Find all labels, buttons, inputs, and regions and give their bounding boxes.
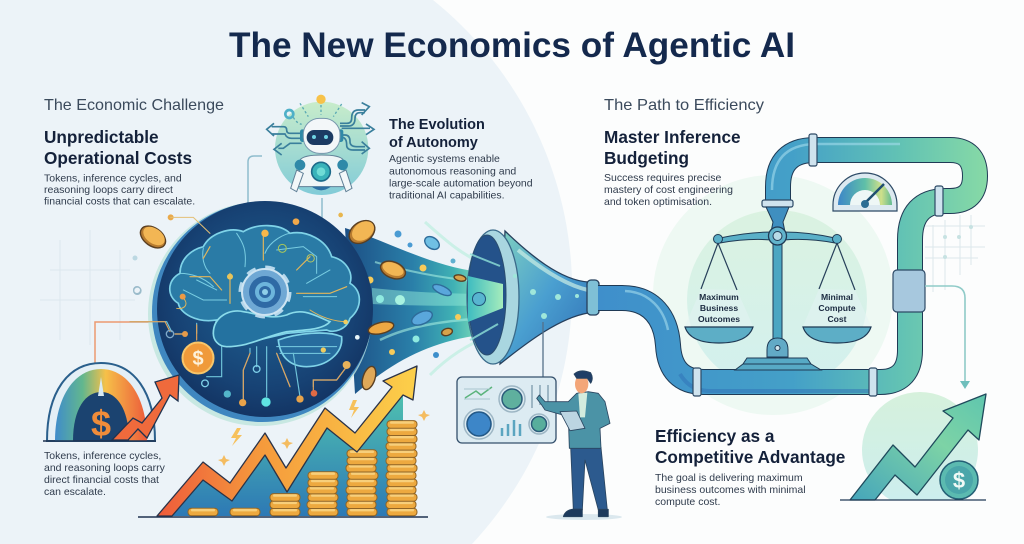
label: minimal compute cost: Cost xyxy=(827,314,847,324)
body: operational costs: financial costs that can escalate. xyxy=(44,196,195,208)
body: budgeting: Success requires precise xyxy=(604,172,721,184)
rising cost arrow xyxy=(112,375,179,440)
body: competitive advantage: business outcomes with minimal xyxy=(655,484,806,496)
cost gauge: $ xyxy=(91,403,111,444)
right pan xyxy=(803,327,871,343)
section label: the path to efficiency: The Path to Efficiency xyxy=(604,97,764,114)
icon: dollar coin: $ xyxy=(192,348,204,370)
brain outline and circuits xyxy=(130,213,360,407)
panel: competitive advantage text xyxy=(655,426,845,508)
coin stacks xyxy=(188,421,417,516)
cost gauge xyxy=(43,363,156,444)
pipe flanges and coupling xyxy=(693,134,943,396)
pipeline xyxy=(598,134,975,396)
control panel xyxy=(457,377,556,443)
body: budgeting: mastery of cost engineering xyxy=(604,184,733,196)
heading: unpredictable operational costs: Operational Costs xyxy=(44,148,192,168)
heading: master inference budgeting: Budgeting xyxy=(604,148,689,168)
escalating cost chart xyxy=(138,366,430,517)
heading: master inference budgeting: Master Inference xyxy=(604,127,741,147)
label: minimal compute cost: Minimal xyxy=(821,292,853,302)
body: bottom left cost text: Tokens, inference cycles, xyxy=(44,450,161,462)
body: evolution of autonomy: large-scale automation beyond xyxy=(389,178,533,190)
green halo behind scale xyxy=(653,175,893,415)
section label: the economic challenge: The Economic Challenge xyxy=(44,97,224,114)
label: maximum business outcomes: Outcomes xyxy=(698,314,740,324)
central brain orb xyxy=(130,201,373,426)
heading: the evolution of autonomy: of Autonomy xyxy=(389,135,478,151)
panel: economic challenge text xyxy=(44,97,224,208)
icon: gear xyxy=(242,269,288,315)
connector lines and faint grid xyxy=(40,156,322,365)
panel: path to efficiency text xyxy=(604,97,764,208)
label: maximum business outcomes: Maximum xyxy=(699,292,739,302)
balance scale xyxy=(685,207,871,370)
zigzag arrow xyxy=(157,366,417,516)
label: maximum business outcomes: Business xyxy=(700,303,738,313)
heading: efficiency as a competitive advantage: Efficiency as a xyxy=(655,426,775,446)
body: operational costs: Tokens, inference cycles, and xyxy=(44,172,182,184)
label: minimal compute cost: Compute xyxy=(818,303,856,313)
data stream to funnel xyxy=(345,222,490,394)
engineer with control panel xyxy=(457,322,622,520)
faint grid and down arrow xyxy=(925,215,985,389)
body: evolution of autonomy: traditional AI capabilities. xyxy=(389,190,505,202)
body: bottom left cost text: and reasoning loops carry xyxy=(44,462,166,474)
body: evolution of autonomy: autonomous reasoning and xyxy=(389,166,516,178)
icon: dollar coin xyxy=(182,342,214,374)
flying coins xyxy=(136,216,466,391)
left background circle xyxy=(0,0,572,544)
robot illustration xyxy=(267,95,374,195)
icon: growth arrow with coin: $ xyxy=(953,468,965,493)
heading: efficiency as a competitive advantage: Competitive Advantage xyxy=(655,447,845,467)
panel: evolution of autonomy text xyxy=(389,117,533,202)
heading: the evolution of autonomy: The Evolution xyxy=(389,117,485,133)
body: competitive advantage: compute cost. xyxy=(655,496,720,508)
funnel xyxy=(467,230,599,364)
icon: growth arrow with coin xyxy=(840,392,986,500)
efficiency gauge xyxy=(833,173,897,211)
title: The New Economics of Agentic AI xyxy=(229,26,795,65)
body: budgeting: and token optimisation. xyxy=(604,196,712,208)
body: operational costs: reasoning loops carry direct xyxy=(44,184,173,196)
person xyxy=(537,371,610,517)
body: competitive advantage: The goal is delivering maximum xyxy=(655,472,803,484)
left pan xyxy=(685,327,753,343)
body: bottom left cost text: direct financial costs that xyxy=(44,474,159,486)
body: bottom left cost text: can escalate. xyxy=(44,486,106,498)
body: evolution of autonomy: Agentic systems enable xyxy=(389,153,500,165)
heading: unpredictable operational costs: Unpredictable xyxy=(44,127,159,147)
